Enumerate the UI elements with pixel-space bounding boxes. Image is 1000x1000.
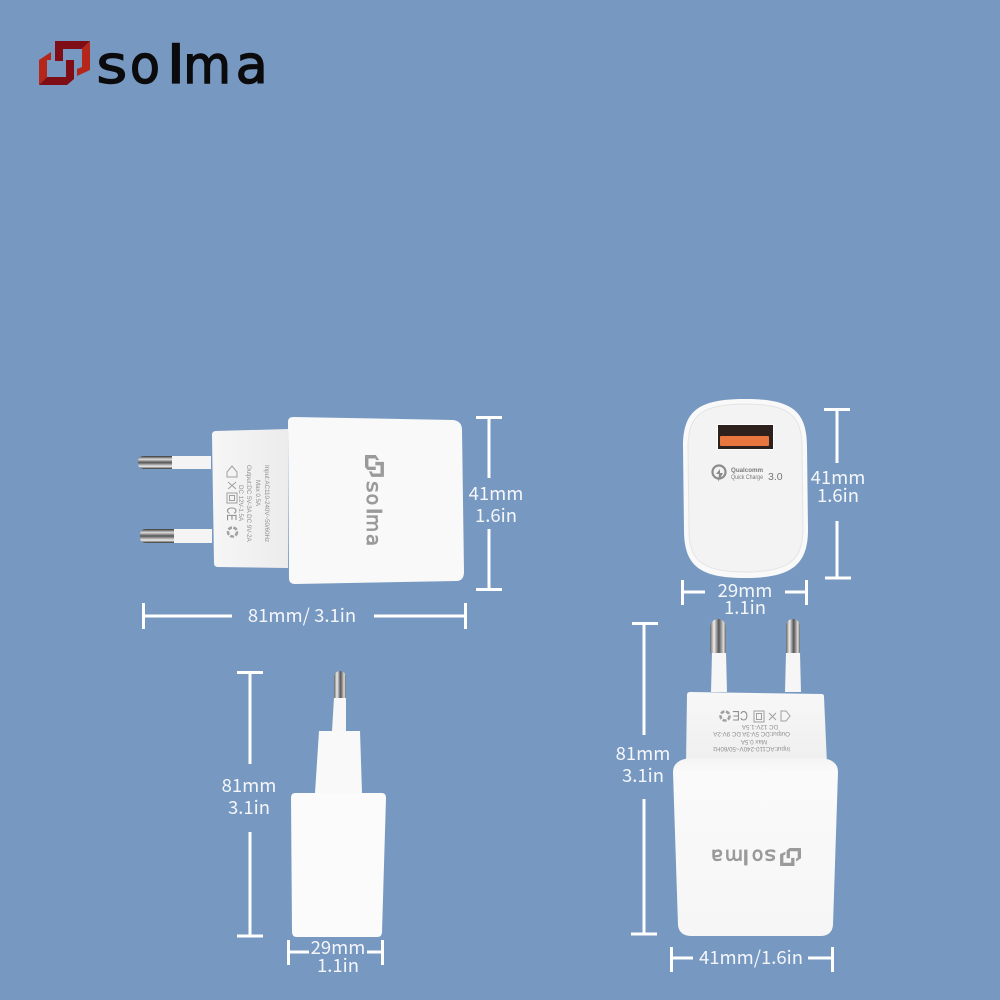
rating text: Max 0.5A <box>254 480 261 507</box>
main body <box>673 758 838 936</box>
product logo: l <box>742 845 749 867</box>
pins <box>138 456 212 543</box>
charger: side profile <box>291 671 386 937</box>
Quick Charge badge: Quick Charge <box>731 474 763 481</box>
inner face <box>688 404 803 572</box>
main body <box>288 417 464 584</box>
certification icons <box>224 466 240 536</box>
dimension: height 81mm profile: 81mm <box>222 772 276 798</box>
rating text: Input:AC110-240V~50/60Hz <box>713 745 790 752</box>
charger: front port view <box>683 399 808 578</box>
dimension: width 29mm front: 29mm <box>718 577 772 603</box>
rating text <box>237 465 270 543</box>
dimension: height 81mm upright: 81mm <box>616 740 670 766</box>
product logo: s <box>362 481 386 493</box>
rating text <box>712 723 790 752</box>
dimension: height 41mm front: 41mm <box>811 464 865 490</box>
product logo: l <box>362 508 384 515</box>
product logo: m <box>725 845 743 869</box>
pins <box>710 619 801 692</box>
Quick Charge badge: Qualcomm <box>731 467 763 474</box>
wordmark: solma: l <box>166 36 185 96</box>
product logo: o <box>362 494 386 505</box>
product logo: m <box>362 514 386 532</box>
dimension: width 41mm upright <box>671 944 833 972</box>
dimension: height 81mm profile <box>222 672 276 936</box>
dimension: height 41mm <box>469 418 523 590</box>
rating text: Input:AC110-240V~50/60Hz <box>263 465 270 542</box>
dimension: width 29mm profile <box>288 934 382 978</box>
USB port <box>717 424 774 450</box>
product logo: a <box>362 534 385 546</box>
body <box>683 399 808 578</box>
wordmark: solma: a <box>236 36 268 96</box>
plug base <box>315 731 362 793</box>
product logo: s <box>764 845 776 869</box>
body <box>291 793 386 937</box>
charger: top view, upright <box>673 619 838 936</box>
dimension: width 29mm profile: 1.1in <box>317 952 359 978</box>
Quick Charge badge <box>712 466 783 483</box>
dimension: width 41mm upright: 41mm/1.6in <box>699 944 803 970</box>
rating text: DC 12V-1.5A <box>741 723 778 730</box>
charger: side view, horizontal <box>138 417 464 584</box>
dimension: height 81mm upright <box>616 624 670 934</box>
wordmark: solma <box>96 35 268 96</box>
dimension: height 41mm: 1.6in <box>475 502 517 528</box>
icon: solma interlocked squares <box>39 41 90 85</box>
dimension: width 81mm <box>142 602 466 629</box>
product logo <box>711 845 801 869</box>
product logo <box>362 455 386 546</box>
product logo: a <box>711 845 723 868</box>
product logo: o <box>752 845 763 869</box>
wordmark: solma: s <box>96 36 127 96</box>
dimension: width 29mm front <box>682 577 807 620</box>
rating text: Output:DC 5V-3A DC 9V-2A <box>245 465 252 543</box>
dimension: height 81mm upright: 3.1in <box>622 762 664 788</box>
pin <box>332 671 346 731</box>
dimension: height 41mm: 41mm <box>469 480 523 506</box>
certification icons: CE <box>224 507 240 521</box>
dimension: height 81mm profile: 3.1in <box>228 794 270 820</box>
dimension: height 41mm front <box>811 410 865 578</box>
certification icons: CE <box>732 708 748 723</box>
wordmark: solma: m <box>183 35 231 95</box>
dimension: width 29mm profile: 29mm <box>311 934 365 960</box>
Quick Charge badge: 3.0 <box>768 471 783 483</box>
rating text: Output:DC 5V-3A DC 9V-2A <box>712 730 790 737</box>
brand logo <box>39 35 268 96</box>
rating text: DC 12V-1.5A <box>237 485 244 522</box>
dimension: width 29mm front: 1.1in <box>724 594 766 620</box>
certification icons <box>720 708 790 723</box>
plug base <box>686 692 827 764</box>
wordmark: solma: o <box>130 35 160 95</box>
rating text: Max 0.5A <box>740 738 767 745</box>
dimension: height 41mm front: 1.6in <box>817 482 859 508</box>
plug base <box>212 429 288 568</box>
dimension: width 81mm: 81mm/ 3.1in <box>248 602 356 628</box>
